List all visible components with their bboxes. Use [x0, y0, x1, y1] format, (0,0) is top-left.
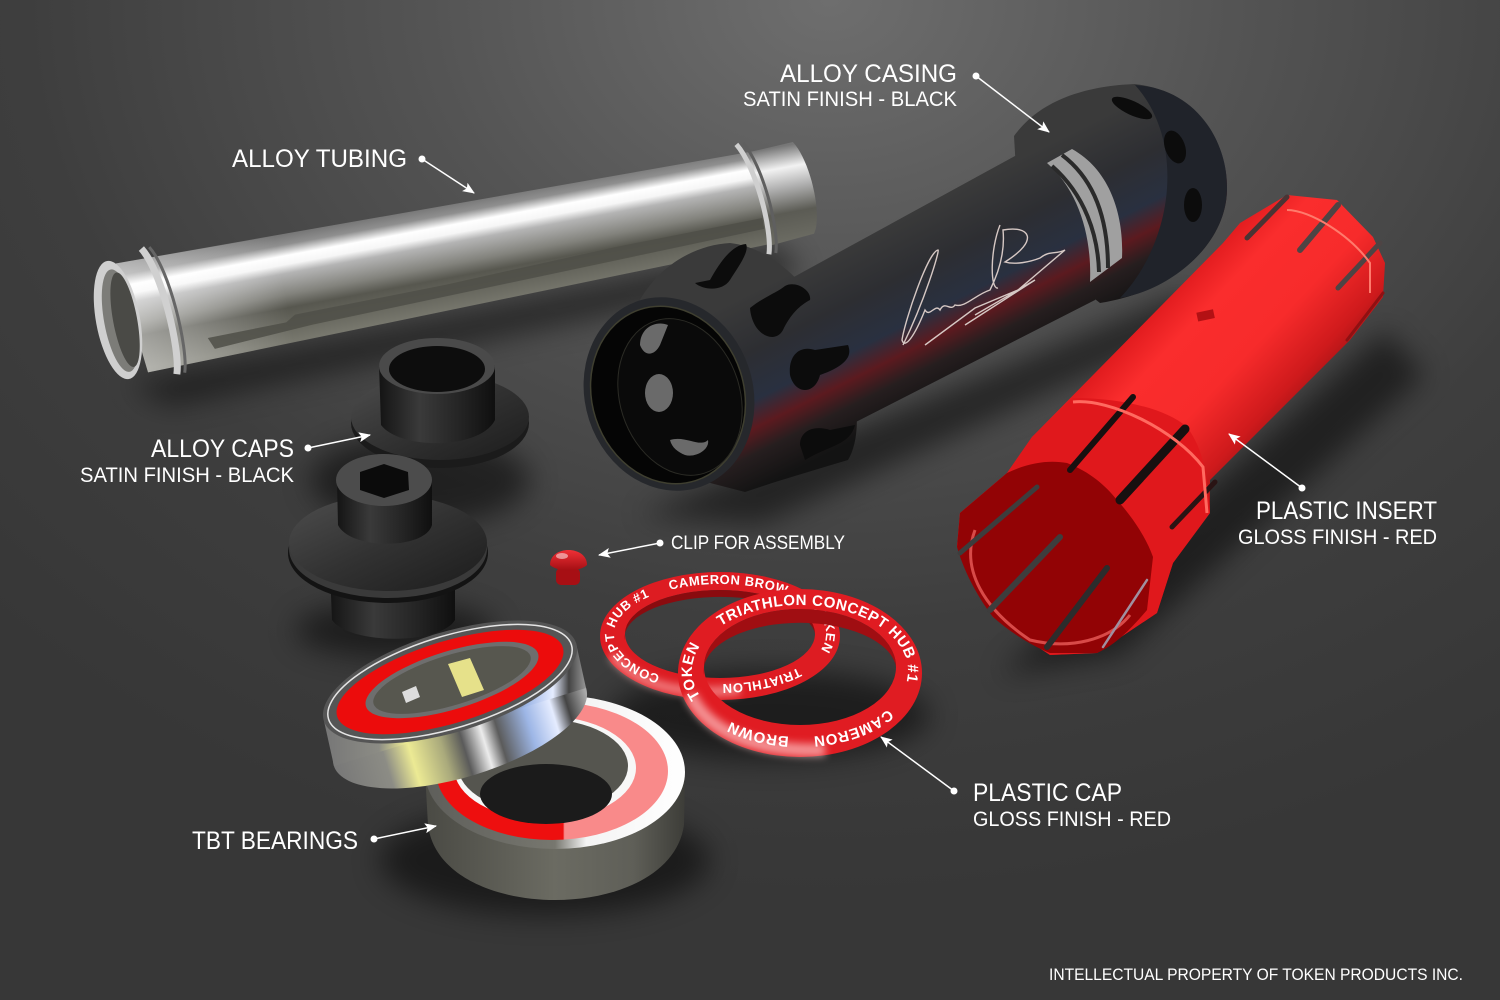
clip for assembly	[550, 550, 587, 585]
signature	[902, 225, 1065, 345]
insert slots	[960, 197, 1383, 647]
label: alloy casing: ALLOY CASING	[780, 60, 957, 88]
right flange back	[1014, 84, 1227, 303]
label: alloy tubing	[232, 145, 474, 193]
left flange	[640, 243, 857, 492]
lower bearing	[425, 695, 685, 900]
label: alloy caps	[80, 435, 370, 487]
label: tbt bearings: TBT BEARINGS	[192, 827, 358, 855]
casing body	[770, 145, 1102, 425]
upper bearing	[309, 596, 601, 813]
label: plastic cap	[881, 737, 1171, 831]
plastic insert	[957, 195, 1385, 655]
casing opening	[559, 275, 779, 513]
copyright note: INTELLECTUAL PROPERTY OF TOKEN PRODUCTS INC.	[1049, 965, 1463, 984]
shadows	[130, 245, 1425, 915]
insert body	[957, 195, 1385, 655]
tube dark machined pattern	[205, 216, 775, 350]
upper cap	[351, 338, 529, 468]
hex socket	[360, 464, 409, 498]
right end	[750, 140, 822, 246]
label: alloy casing	[743, 60, 1049, 132]
plastic cap rings	[600, 572, 922, 762]
tube open end	[85, 257, 151, 383]
label: alloy caps: ALLOY CAPS	[151, 435, 294, 463]
alloy tubing	[84, 126, 826, 387]
inner holes	[640, 324, 708, 456]
label: alloy tubing: ALLOY TUBING	[232, 145, 407, 173]
insert front band	[957, 398, 1210, 655]
rear cap rim	[1287, 210, 1370, 293]
label: clip for assembly: CLIP FOR ASSEMBLY	[671, 533, 845, 554]
label: alloy caps: SATIN FINISH - BLACK	[80, 464, 294, 487]
logo band	[1047, 149, 1122, 282]
ring front: CAMERON	[814, 711, 892, 747]
right collar	[736, 141, 773, 256]
ring front	[678, 589, 922, 762]
alloy caps	[288, 338, 529, 639]
tbt bearings	[309, 596, 685, 900]
label: alloy casing: SATIN FINISH - BLACK	[743, 88, 957, 111]
slots	[695, 92, 1202, 460]
left collar	[141, 246, 181, 376]
ring back: CONCEPT HUB #1	[604, 590, 658, 682]
front band rim	[1073, 402, 1207, 513]
ring front: BROWN	[727, 722, 788, 747]
label: plastic insert: PLASTIC INSERT	[1256, 497, 1437, 525]
ring back	[600, 572, 840, 702]
ring back: TRIATHLON	[723, 668, 802, 693]
inner rim	[971, 530, 1130, 644]
ring back: CAMERON BROW	[669, 574, 789, 591]
ring front: TOKEN	[682, 642, 700, 702]
alloy casing	[559, 84, 1227, 513]
label: plastic insert	[1229, 434, 1437, 549]
label: plastic insert: GLOSS FINISH - RED	[1238, 526, 1437, 549]
insert opening	[957, 462, 1153, 653]
ring front: TRIATHLON CONCEPT HUB #1	[716, 594, 918, 682]
lower cap	[288, 454, 488, 639]
small tab	[1196, 309, 1215, 322]
label: clip for assembly	[599, 533, 845, 555]
tube body	[116, 145, 777, 375]
label: plastic cap: PLASTIC CAP	[973, 779, 1122, 807]
label: plastic cap: GLOSS FINISH - RED	[973, 808, 1171, 831]
ring back: TOKEN	[814, 610, 836, 654]
